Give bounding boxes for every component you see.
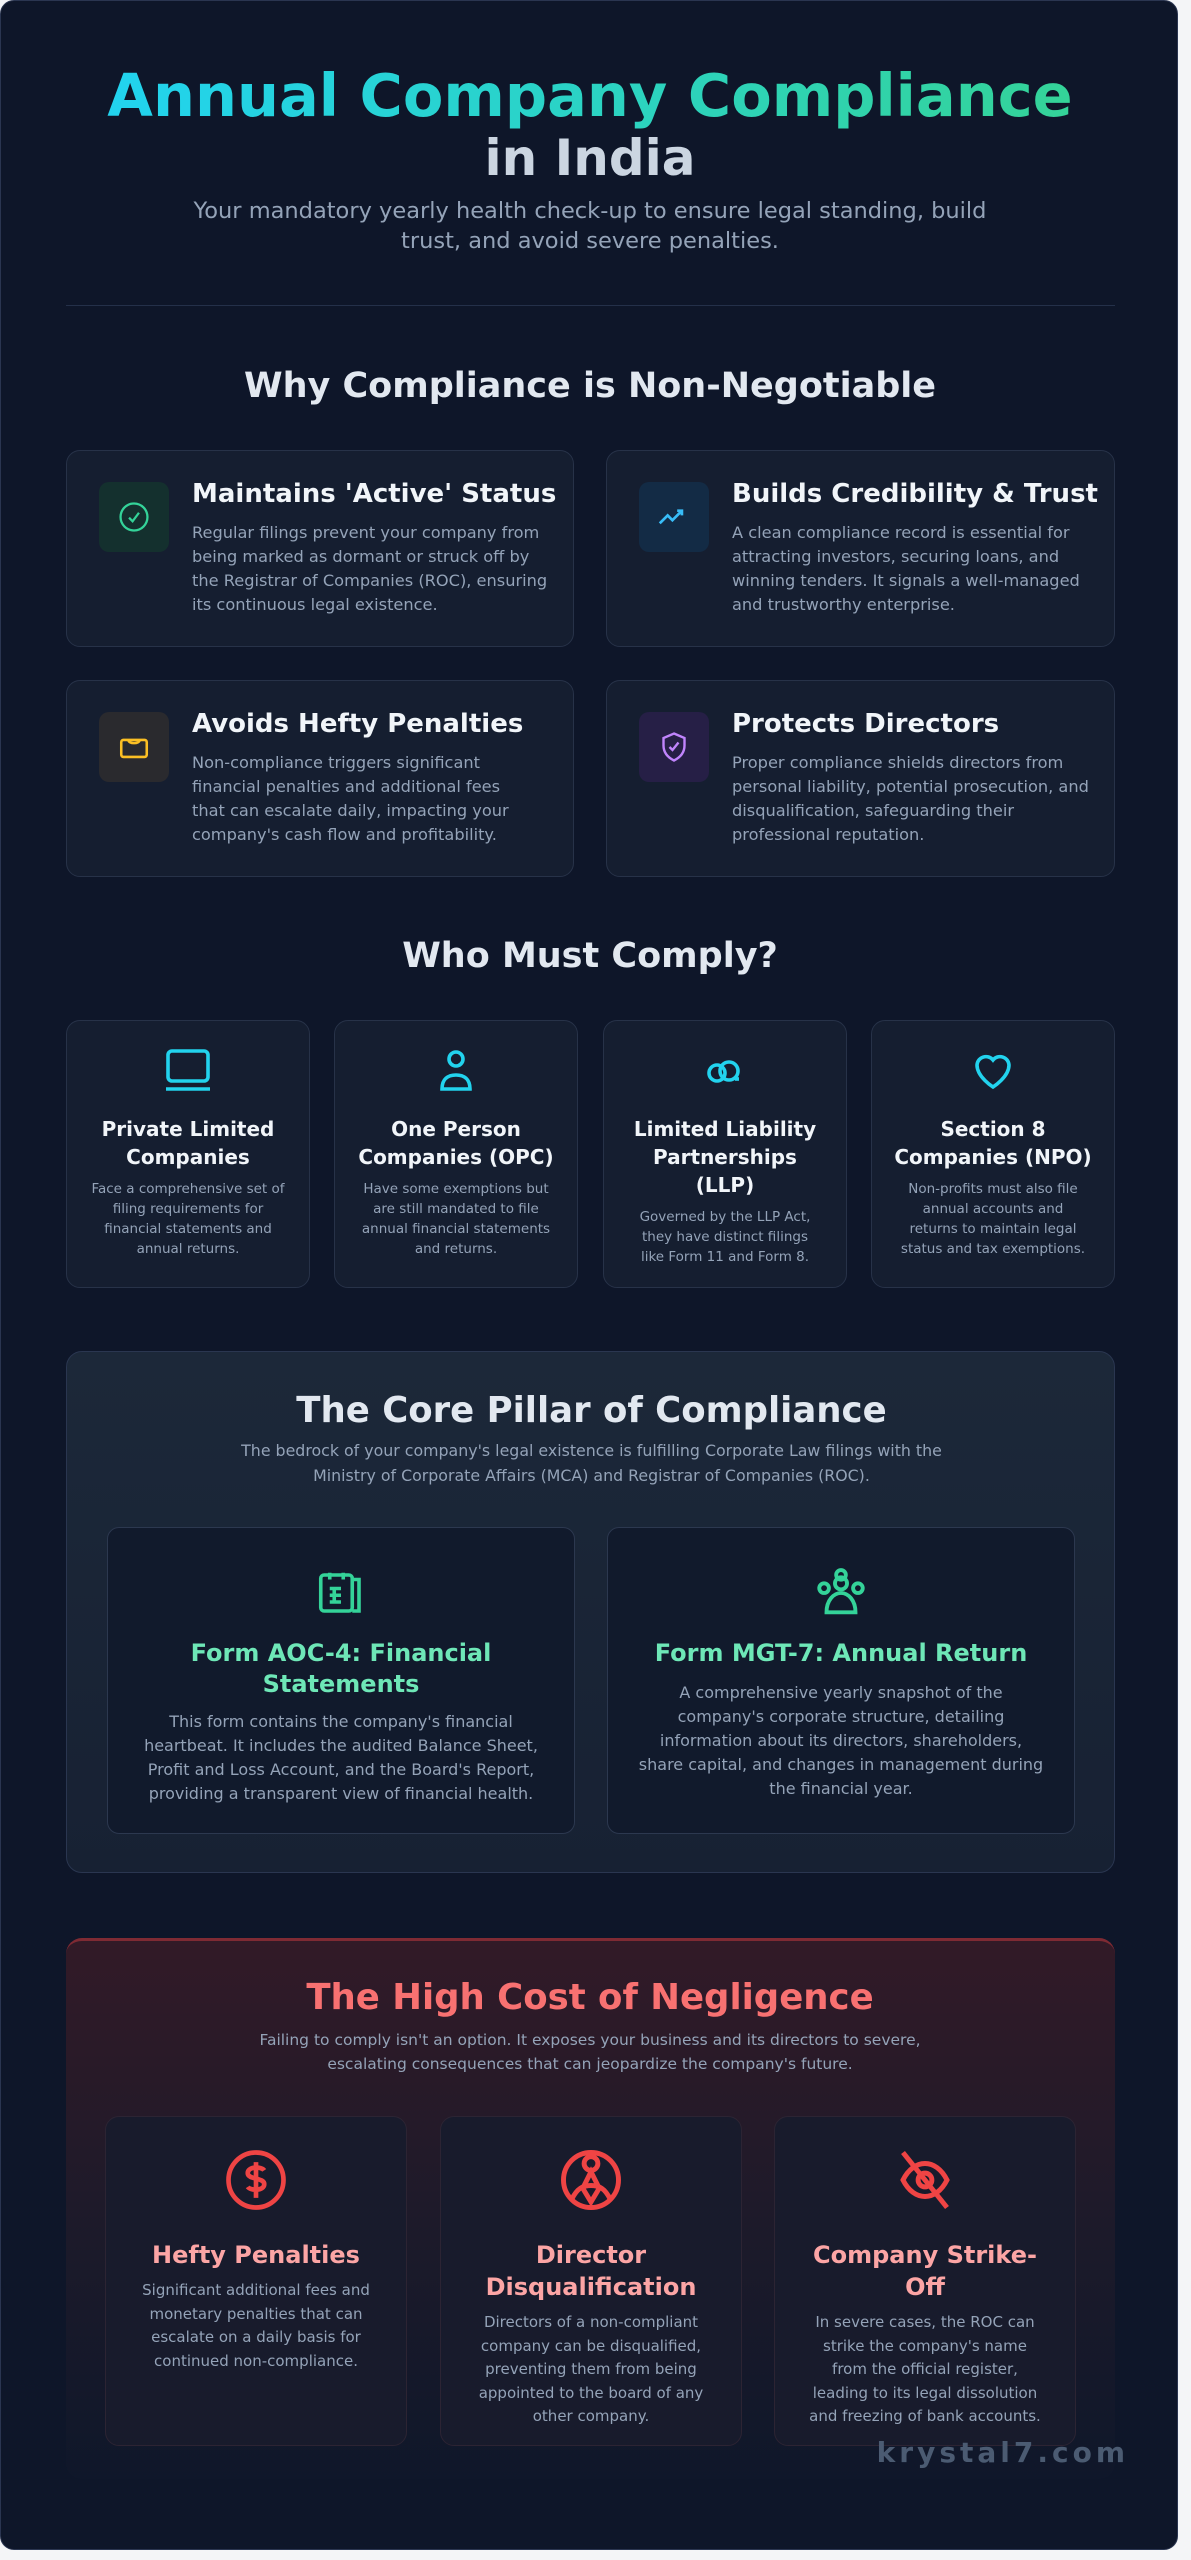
card: section 8: Companies (NPO) xyxy=(894,1145,1092,1169)
icon: laptop xyxy=(166,1049,210,1091)
panel: core pillar xyxy=(66,1351,1115,1873)
card: director disqualification: Directors of a non-compliant company can be disqualified, preventing them from being appointed to the board of any other company. xyxy=(479,2313,703,2425)
card: strike-off: Company Strike- xyxy=(813,2241,1037,2269)
card: AOC-4: Form AOC-4: Financial Statements xyxy=(191,1639,491,1698)
intro text: Your mandatory yearly health check-up to ensure legal standing, build trust, and avoid severe penalties. xyxy=(194,198,986,254)
card: LLP: Governed by the LLP Act, they have distinct filings like Form 11 and Form 8. xyxy=(640,1209,810,1265)
card: LLP xyxy=(603,1020,847,1288)
icon: shield xyxy=(639,712,709,782)
card: active status: Maintains 'Active' Status xyxy=(192,479,556,509)
negligence intro: Failing to comply isn't an option. It exposes your business and its directors to severe, escalating consequences that can jeopardize the company's future. xyxy=(259,2031,921,2073)
icon: link xyxy=(707,1060,740,1083)
card: director disqualification xyxy=(440,2116,742,2446)
card: hefty penalties: Significant additional fees and monetary penalties that can escalate on a daily basis for continued non-compliance. xyxy=(142,2281,370,2370)
card: LLP: (LLP) xyxy=(696,1173,754,1197)
icon: eye off xyxy=(900,2151,950,2209)
card: private limited: Private Limited xyxy=(102,1117,274,1141)
icon: group xyxy=(817,1568,865,1614)
card: private limited xyxy=(66,1020,310,1288)
subtitle heading: in India xyxy=(484,129,696,187)
card: strike-off: Off xyxy=(905,2273,945,2301)
icon: person xyxy=(440,1050,472,1091)
card: directors: Protects Directors xyxy=(732,709,999,739)
card: active status xyxy=(66,450,574,647)
card: strike-off: and freezing of bank accounts. xyxy=(809,2407,1041,2425)
card: section 8 xyxy=(871,1020,1115,1288)
card: credibility: Builds Credibility & Trust xyxy=(732,479,1098,509)
footer brand: krystal7.com xyxy=(877,2436,1129,2469)
card: strike-off: from the official register, xyxy=(832,2360,1018,2378)
card: section 8: Non-profits must also file annual accounts and returns to maintain legal status and tax exemptions. xyxy=(901,1181,1085,1257)
icon: document xyxy=(318,1572,361,1613)
card: strike-off: In severe cases, the ROC can xyxy=(815,2313,1035,2331)
card: credibility: A clean compliance record is essential for attracting investors, securing loans, and winning tenders. It signals a well-managed and trustworthy enterprise. xyxy=(732,523,1080,614)
card: strike-off: leading to its legal dissolution xyxy=(813,2384,1037,2402)
card: OPC: One Person xyxy=(391,1117,521,1141)
card: OPC: Companies (OPC) xyxy=(358,1145,554,1169)
card: strike-off: strike the company's name xyxy=(823,2336,1027,2354)
icon: trend xyxy=(639,482,709,552)
card: MGT-7: A comprehensive yearly snapshot of the company's corporate structure, detailing information about its directors, shareholders, share capital, and changes in management during the financial year. xyxy=(639,1683,1043,1798)
card: directors: Proper compliance shields directors from personal liability, potential prosecution, and disqualification, safeguarding their professional reputation. xyxy=(732,753,1089,844)
heading: who must comply: Who Must Comply? xyxy=(402,936,778,976)
card: directors xyxy=(606,680,1115,877)
card: MGT-7: Form MGT-7: Annual Return xyxy=(655,1639,1027,1667)
card: OPC xyxy=(334,1020,578,1288)
card: penalties xyxy=(66,680,574,877)
card: hefty penalties: Hefty Penalties xyxy=(152,2241,360,2269)
icon: dollar xyxy=(226,2150,286,2210)
icon: wallet xyxy=(99,712,169,782)
card: strike-off xyxy=(774,2116,1076,2446)
card: active status: Regular filings prevent your company from being marked as dormant or struck off by the Registrar of Companies (ROC), ensuring its continuous legal existence. xyxy=(192,523,547,614)
card: hefty penalties xyxy=(105,2116,407,2446)
card: director disqualification: Disqualification xyxy=(486,2273,696,2301)
card: LLP: Limited Liability xyxy=(634,1117,816,1141)
card: penalties: Non-compliance triggers significant financial penalties and additional fees that can escalate daily, impacting your company's cash flow and profitability. xyxy=(192,753,509,844)
card: private limited: Companies xyxy=(126,1145,250,1169)
card: section 8: Section 8 xyxy=(940,1117,1046,1141)
heading: why compliance: Why Compliance is Non-Negotiable xyxy=(244,366,936,406)
card: director disqualification: Director xyxy=(536,2241,646,2269)
heading: core pillar: The Core Pillar of Compliance xyxy=(296,1390,887,1431)
card: AOC-4 xyxy=(107,1527,575,1834)
card: credibility xyxy=(606,450,1115,647)
card: penalties: Avoids Hefty Penalties xyxy=(192,709,523,739)
icon: user circle xyxy=(561,2150,621,2210)
card: OPC: Have some exemptions but are still mandated to file annual financial statements and returns. xyxy=(362,1181,550,1257)
icon: check xyxy=(99,482,169,552)
icon: heart xyxy=(975,1054,1011,1090)
title: Annual Company Compliance xyxy=(107,61,1073,130)
card: private limited: Face a comprehensive set of filing requirements for financial statements and annual returns. xyxy=(91,1181,285,1257)
core intro text: The bedrock of your company's legal existence is fulfilling Corporate Law filings with the Ministry of Corporate Affairs (MCA) and Registrar of Companies (ROC). xyxy=(241,1441,942,1485)
heading: negligence: The High Cost of Negligence xyxy=(306,1977,874,2018)
panel: negligence xyxy=(66,1938,1115,2479)
card: LLP: Partnerships xyxy=(653,1145,797,1169)
card: AOC-4: This form contains the company's financial heartbeat. It includes the audited Balance Sheet, Profit and Loss Account, and the Board's Report, providing a transparent view of financial health. xyxy=(144,1712,538,1803)
card: MGT-7 xyxy=(607,1527,1075,1834)
